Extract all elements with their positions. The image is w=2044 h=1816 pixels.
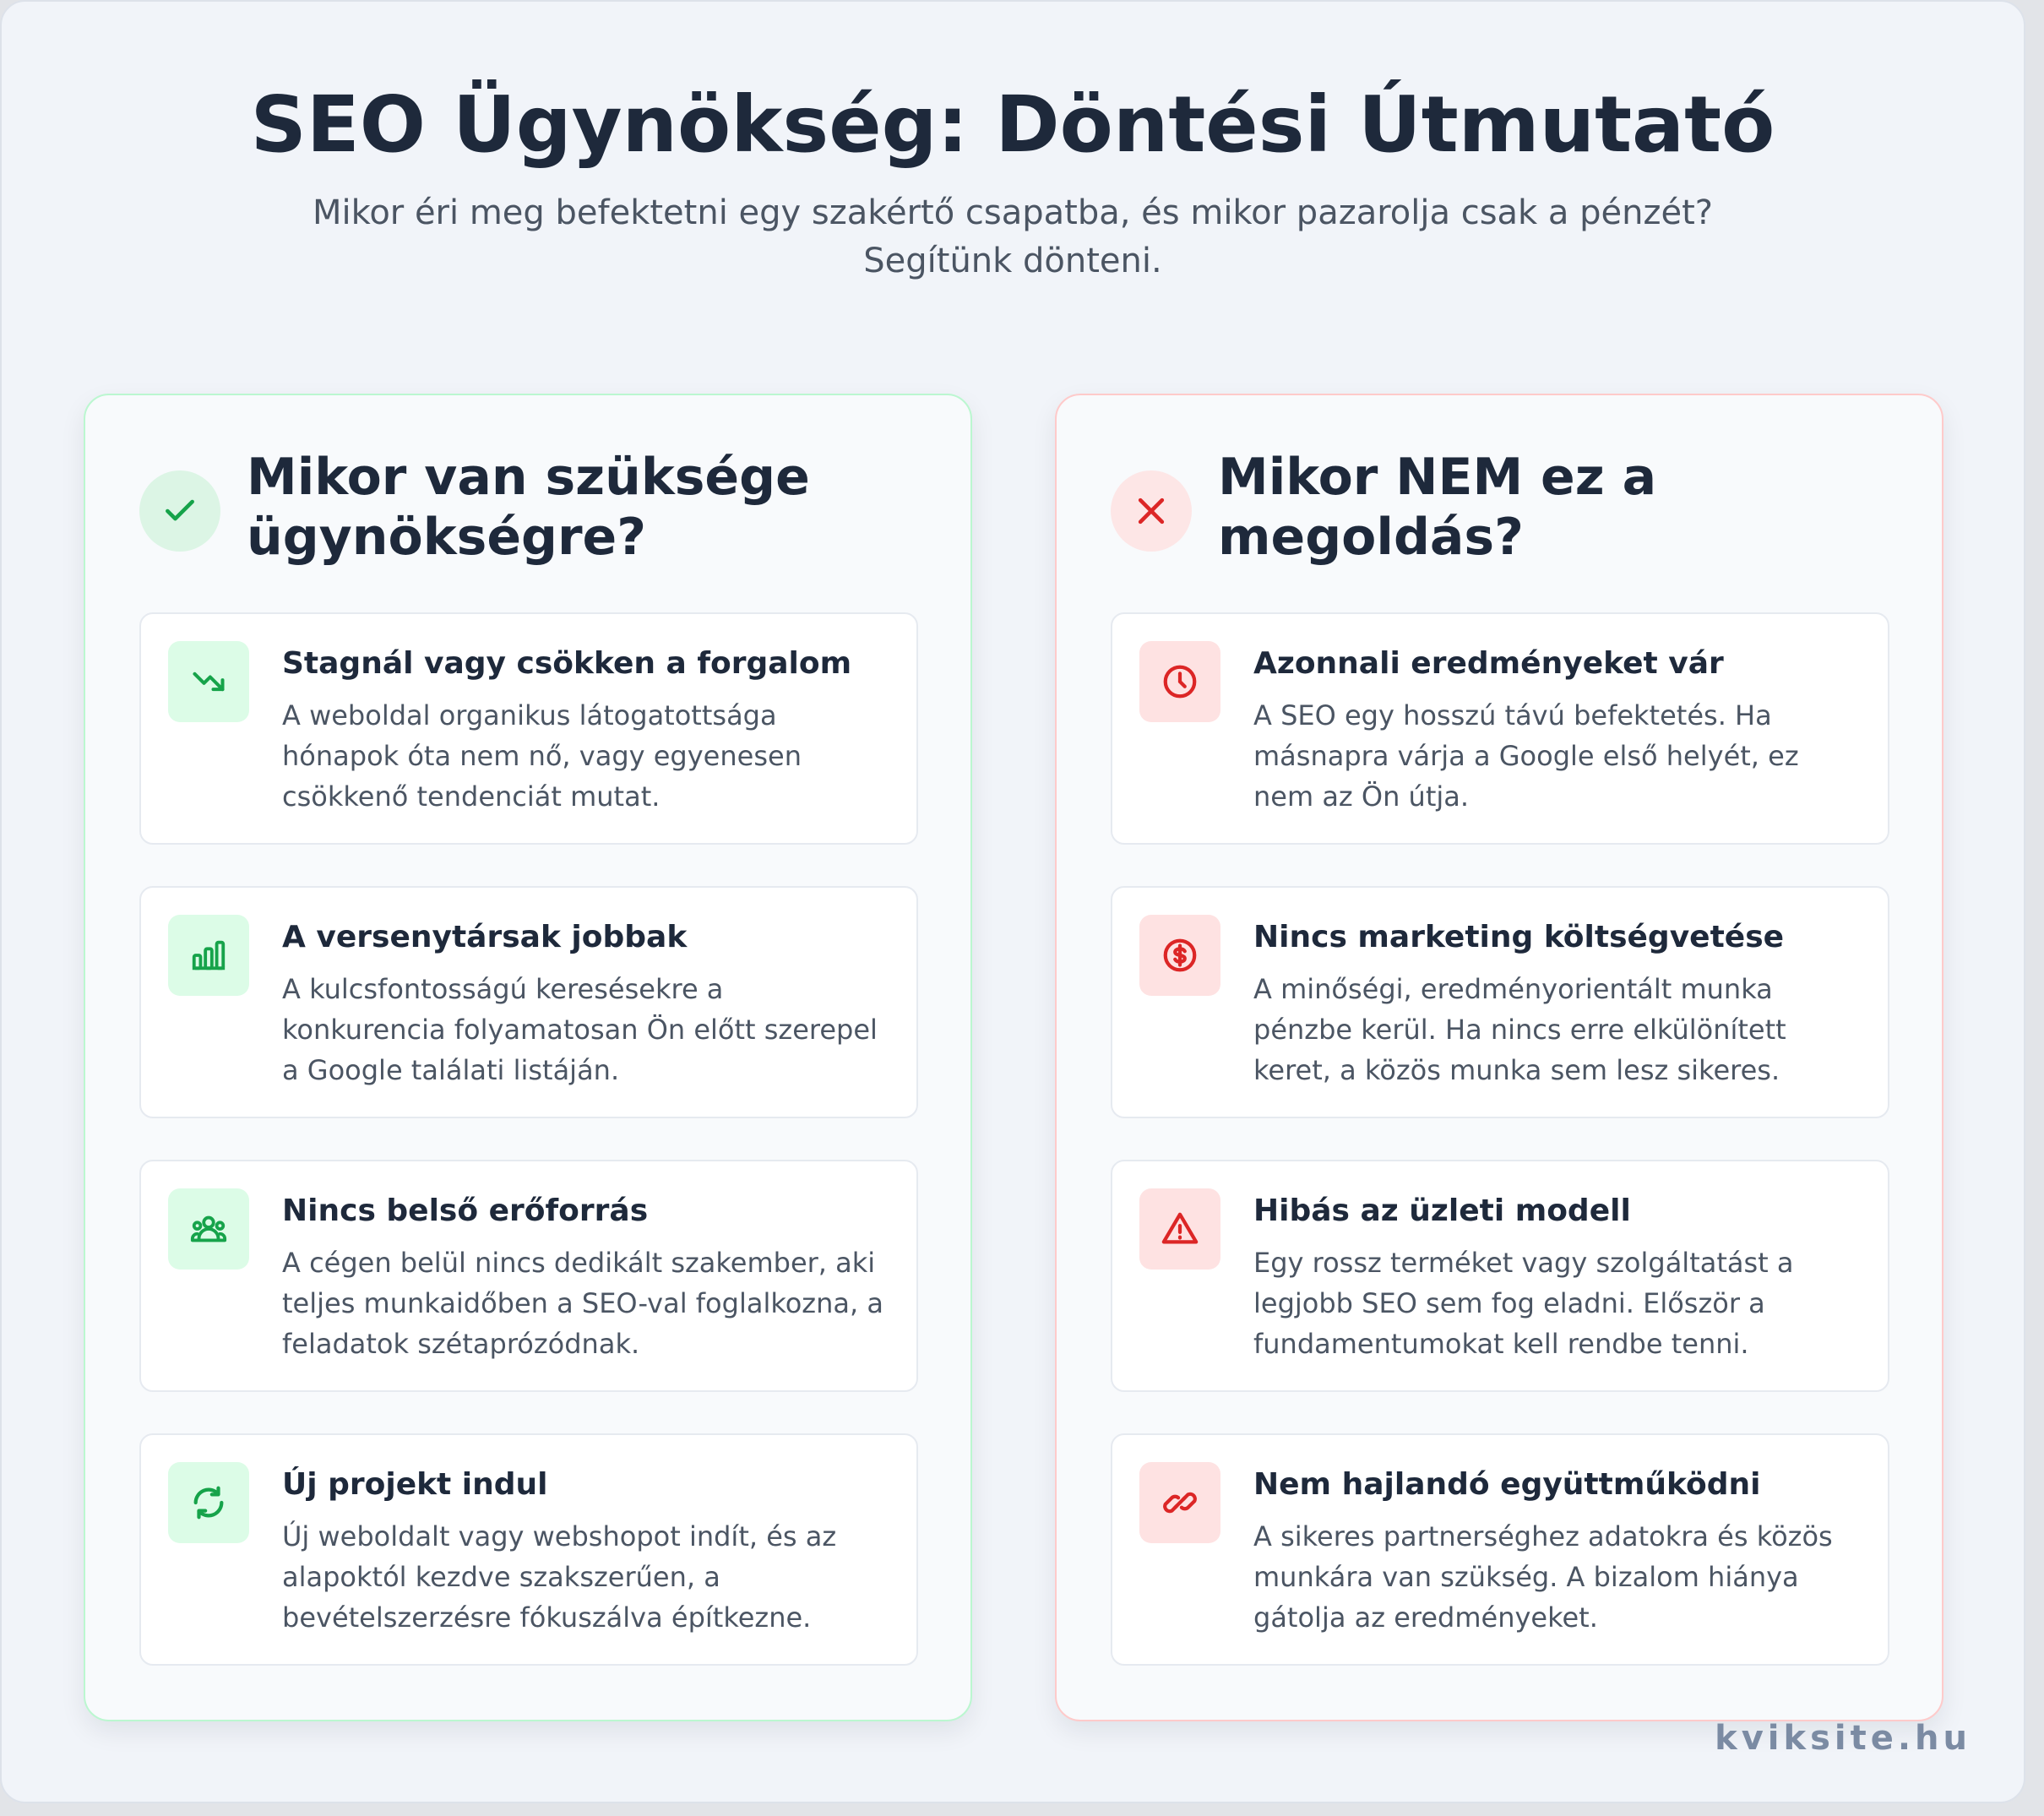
heading: when needed: Mikor van szüksége: [247, 448, 810, 507]
item: resources: Nincs belső erőforrás: [282, 1193, 648, 1228]
item: business model: [1111, 1160, 1889, 1392]
item: resources: [139, 1160, 918, 1392]
item: immediate results: Azonnali eredményeket vár: [1253, 646, 1724, 681]
title: SEO Ügynökség: Döntési Útmutató: [251, 79, 1775, 170]
item: new project: Új weboldalt vagy webshopot indít, és az alapoktól kezdve szakszerűen, a bevételszerzésre fókuszálva építkezne.: [282, 1520, 836, 1634]
item: new project: Új projekt indul: [282, 1467, 548, 1502]
heading: when needed: [247, 448, 810, 567]
item: traffic: A weboldal organikus látogatottsága hónapok óta nem nő, vagy egyenesen csökkenő tendenciát mutat.: [282, 699, 802, 813]
item: immediate results: [1111, 612, 1889, 845]
item: competitors: [139, 886, 918, 1118]
icon: refresh: [168, 1462, 249, 1543]
item: resources: A cégen belül nincs dedikált szakember, aki teljes munkaidőben a SEO-val foglalkozna, a feladatok szétaprózódnak.: [282, 1247, 883, 1360]
brand: kviksite.hu: [1715, 1719, 1971, 1758]
subtitle: Mikor éri meg befektetni egy szakértő csapatba, és mikor pazarolja csak a pénzét?: [313, 193, 1713, 232]
item: competitors: A versenytársak jobbak: [282, 920, 687, 954]
icon: users: [168, 1188, 249, 1270]
icon: bar chart: [168, 915, 249, 996]
icon: warning: [1139, 1188, 1220, 1270]
subtitle: Segítünk dönteni.: [863, 242, 1162, 280]
subtitle: [313, 193, 1713, 280]
icon: clock: [1139, 641, 1220, 722]
panel: when needed: [84, 394, 972, 1721]
item: competitors: A kulcsfontosságú keresésekre a: [282, 973, 723, 1005]
heading: when needed: ügynökségre?: [247, 508, 646, 567]
item: business model: Egy rossz terméket vagy szolgáltatást a legjobb SEO sem fog eladni. Először a fundamentumokat kell rendbe tenni.: [1253, 1247, 1794, 1360]
icon: coin: [1139, 915, 1220, 996]
item: new project: [139, 1433, 918, 1666]
heading: when not: megoldás?: [1218, 508, 1524, 567]
item: cooperation: Nem hajlandó együttműködni: [1253, 1467, 1760, 1502]
item: traffic: Stagnál vagy csökken a forgalom: [282, 646, 851, 681]
item: budget: A minőségi, eredményorientált munka pénzbe kerül. Ha nincs erre elkülönített keret, a közös munka sem lesz sikeres.: [1253, 973, 1786, 1086]
item: cooperation: A sikeres partnerséghez adatokra és közös munkára van szükség. A bizalom hiánya gátolja az eredményeket.: [1253, 1520, 1833, 1634]
item: immediate results: A SEO egy hosszú távú befektetés. Ha másnapra várja a Google első helyét, ez: [1253, 699, 1799, 772]
icon: x: [1111, 470, 1192, 552]
item: cooperation: [1111, 1433, 1889, 1666]
icon: broken link: [1139, 1462, 1220, 1543]
item: traffic: [139, 612, 918, 845]
heading: when not: [1218, 448, 1656, 567]
icon: check: [139, 470, 220, 552]
item: competitors: konkurencia folyamatosan Ön előtt szerepel a Google találati listáján.: [282, 1014, 878, 1086]
item: immediate results: nem az Ön útja.: [1253, 780, 1469, 813]
panel: when not: [1055, 394, 1943, 1721]
item: business model: Hibás az üzleti modell: [1253, 1193, 1631, 1228]
item: budget: [1111, 886, 1889, 1118]
heading: when not: Mikor NEM ez a: [1218, 448, 1656, 507]
icon: trend down: [168, 641, 249, 722]
item: budget: Nincs marketing költségvetése: [1253, 920, 1784, 954]
